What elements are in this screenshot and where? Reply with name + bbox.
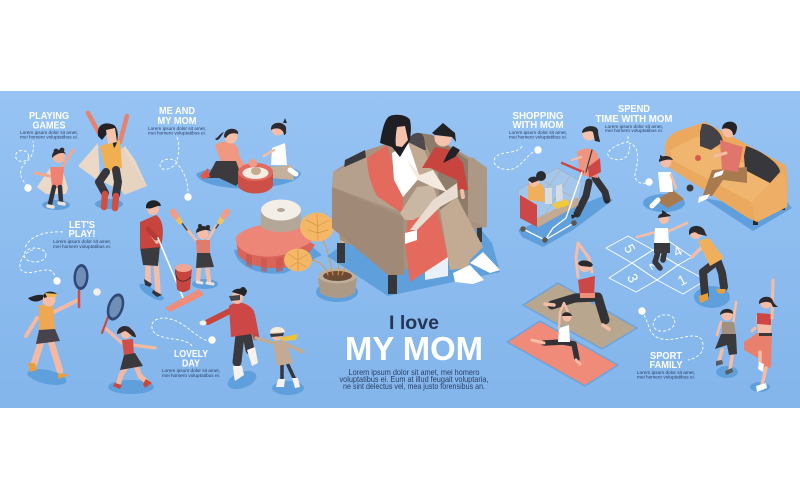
title body text (340, 367, 488, 391)
figure: child in cape (35, 148, 73, 210)
heading: playing games: PLAYING (29, 110, 69, 122)
heading: let's play: Lorem ipsum dolor sit amet, (53, 239, 111, 245)
title: I love my mom (345, 313, 483, 368)
armchair with mom and child reading (327, 115, 500, 296)
heading: shopping with mom: Lorem ipsum dolor sit amet, (509, 130, 567, 136)
icon: red bucket (175, 264, 192, 292)
heading: me and my mom (148, 105, 206, 136)
dashed path: shopping with mom (494, 146, 542, 170)
heading: lovely day: DAY (182, 358, 200, 370)
heading: lovely day: Lorem ipsum dolor sit amet, (162, 368, 220, 374)
heading: shopping with mom: mei homero voluptatibus ei. (509, 134, 567, 140)
heading: shopping with mom (509, 110, 567, 140)
cushion and pouf (234, 200, 322, 274)
heading: let's play: PLAY! (68, 228, 96, 240)
heading: playing games: Lorem ipsum dolor sit amet, (20, 130, 78, 136)
title: I love my mom: MY MOM (345, 331, 483, 368)
title body text: Lorem ipsum dolor sit amet, mei homero (348, 367, 480, 377)
figure: yoga child (532, 303, 580, 364)
icon: pumpkin cushion (284, 248, 312, 272)
title body text: voluptatibus ei. Eum at illud feugait voluptaria, (340, 374, 488, 384)
hopscotch grid: 4 (670, 242, 685, 260)
heading: sport family: SPORT (650, 350, 683, 362)
heading: sport family: mei homero voluptatibus ei. (637, 374, 695, 380)
figure: tennis mom (26, 264, 89, 388)
icon: mop (158, 238, 204, 312)
hopscotch grid: 1 (675, 271, 689, 289)
dashed path: let's play (20, 232, 63, 285)
figure: skating mom (200, 287, 259, 393)
heading: spend time with mom: SPEND (618, 103, 650, 115)
icon: tennis ball (93, 288, 101, 296)
figure: mom and daughter washing pet (196, 118, 301, 194)
figure: woman on hopscotch (689, 226, 730, 308)
heading: lovely day: LOVELY (174, 348, 208, 360)
heading: spend time with mom: mei homero voluptatibus ei. (605, 128, 663, 134)
heading: playing games (20, 110, 78, 140)
heading: let's play: mei homero voluptatibus ei. (53, 244, 111, 250)
hopscotch grid: 2 (646, 258, 664, 272)
icon: folded blanket (357, 257, 384, 275)
figure: sport mom (744, 280, 778, 392)
figure: girl on hopscotch (637, 210, 687, 268)
figure: mom superhero (78, 113, 147, 209)
figure: tennis girl (102, 291, 155, 394)
figure: yoga mom (545, 243, 609, 329)
figure: man on orange sofa (665, 122, 792, 231)
figure: girl on floor with yarn (643, 155, 694, 212)
hopscotch grid: 5 (621, 241, 639, 256)
yoga mats (507, 283, 637, 386)
figure: parent with mop (139, 200, 164, 300)
figure: shopping cart with mom and child (518, 126, 613, 247)
heading: spend time with mom: TIME WITH MOM (596, 113, 673, 125)
title body text: ne sint delectus vel, mea justo forensibus an. (343, 381, 485, 391)
plant in pot (300, 212, 371, 302)
heading: me and my mom: mei homero voluptatibus ei. (148, 130, 206, 136)
figure: girl with dusters (173, 212, 227, 289)
figure: sport kid (715, 302, 738, 378)
heading: playing games: GAMES (32, 120, 66, 132)
heading: lovely day: mei homero voluptatibus ei. (162, 373, 220, 379)
heading: shopping with mom: SHOPPING (512, 110, 564, 122)
heading: lovely day (162, 348, 220, 379)
heading: let's play (53, 219, 111, 250)
hopscotch grid (606, 236, 706, 294)
hopscotch grid: 3 (624, 271, 642, 285)
dashed path: lovely day (152, 318, 216, 346)
heading: spend time with mom (596, 103, 673, 134)
dashed path: playing games (16, 141, 33, 192)
heading: playing games: mei homero voluptatibus ei. (20, 134, 78, 140)
heading: let's play: LET'S (69, 219, 95, 231)
dashed path: sport family (638, 307, 703, 360)
heading: sport family: FAMILY (650, 359, 682, 371)
dashed path: spend time with mom (608, 136, 653, 186)
heading: sport family: Lorem ipsum dolor sit amet, (637, 370, 695, 376)
heading: me and my mom: ME AND (159, 105, 195, 117)
figure: skating child (256, 327, 304, 395)
heading: sport family (637, 350, 695, 380)
heading: shopping with mom: WITH MOM (512, 119, 564, 131)
dashed path: me and my mom (160, 137, 192, 201)
heading: me and my mom: Lorem ipsum dolor sit amet, (148, 126, 206, 132)
title: I love my mom: I love (389, 313, 439, 334)
heading: me and my mom: MY MOM (158, 115, 197, 127)
heading: spend time with mom: Lorem ipsum dolor sit amet, (605, 124, 663, 130)
background panel (0, 91, 800, 408)
